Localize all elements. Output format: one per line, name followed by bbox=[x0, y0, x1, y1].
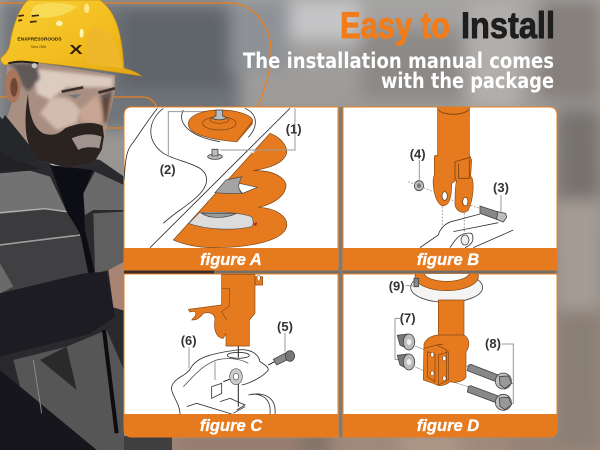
illustration: strut and steering knuckle: (5) bbox=[277, 319, 293, 334]
panel: figure A bbox=[124, 107, 338, 270]
hard hat: ENXPRESSROODS bbox=[17, 37, 62, 42]
caption band: figure A bbox=[200, 251, 262, 269]
hard hat: X bbox=[69, 42, 83, 57]
title: Install bbox=[461, 5, 555, 46]
illustration: strut base, nuts and long bolts: (9) bbox=[389, 279, 405, 294]
panel: figure B bbox=[343, 107, 557, 270]
worker in hard hat bbox=[0, 0, 142, 450]
jacket bbox=[0, 117, 124, 450]
illustration: strut fork, bolt and nut: (4) bbox=[410, 146, 426, 161]
illustration: strut fork, bolt and nut: (3) bbox=[493, 180, 509, 195]
illustration: coil spring and top mount: (2) bbox=[160, 162, 176, 177]
illustration: coil spring and top mount: (1) bbox=[286, 121, 302, 136]
illustration: coil spring and top mount bbox=[124, 108, 302, 248]
head bbox=[0, 60, 115, 168]
illustration: strut and steering knuckle: (6) bbox=[181, 333, 197, 348]
hard hat: Since 2006 bbox=[31, 45, 46, 49]
illustration: strut base, nuts and long bolts: (8) bbox=[485, 336, 501, 351]
illustration: strut base, nuts and long bolts: (7) bbox=[400, 311, 416, 326]
panel: figure D bbox=[343, 263, 557, 437]
title bbox=[340, 5, 555, 46]
hard hat bbox=[1, 0, 142, 76]
illustration: strut and steering knuckle bbox=[171, 274, 295, 414]
caption band: figure B bbox=[417, 251, 479, 269]
caption band: figure D bbox=[417, 417, 479, 435]
panel: figure C bbox=[124, 274, 338, 437]
title: Easy to bbox=[340, 5, 450, 46]
caption band bbox=[124, 414, 338, 437]
caption band bbox=[343, 248, 557, 270]
caption band bbox=[343, 414, 557, 437]
subtitle bbox=[243, 49, 554, 93]
illustration: strut fork, bolt and nut bbox=[408, 107, 513, 248]
subtitle: The installation manual comes bbox=[243, 49, 554, 73]
caption band: figure C bbox=[200, 417, 263, 435]
illustration: strut base, nuts and long bolts bbox=[389, 263, 513, 410]
caption band bbox=[124, 248, 338, 270]
subtitle: with the package bbox=[381, 69, 554, 93]
decorative orange outlines bbox=[0, 3, 271, 128]
